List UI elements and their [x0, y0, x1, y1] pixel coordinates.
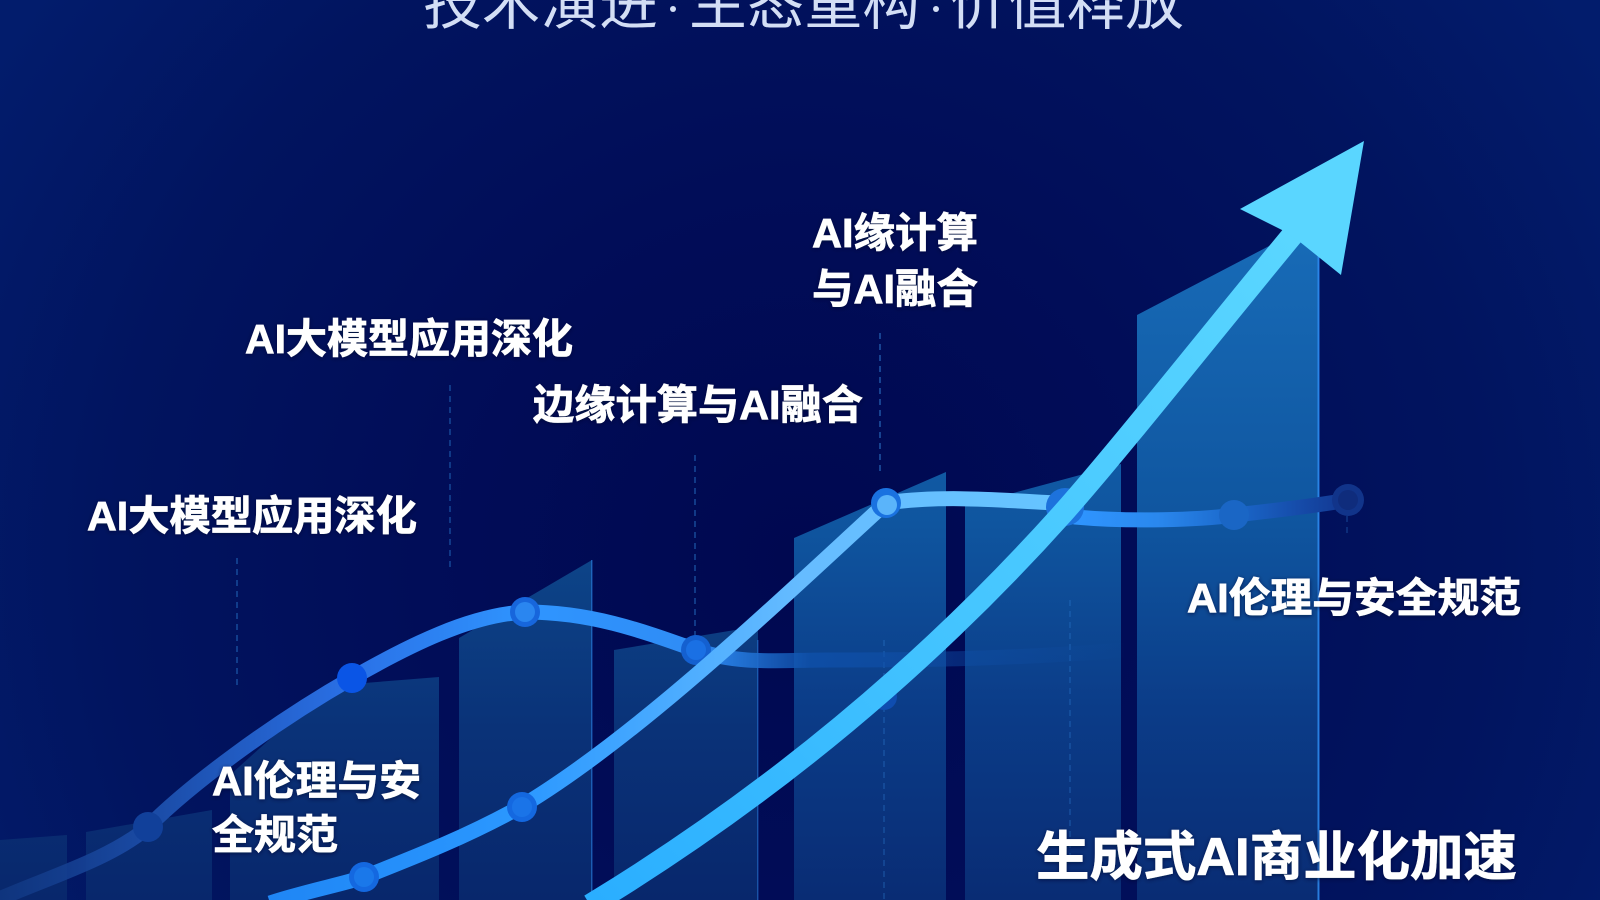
bar 7 — [965, 464, 1121, 900]
label: edge computing and AI: 边缘计算与AI融合 — [533, 382, 863, 428]
label: AI ethics and safety, left line 1: AI伦理与安 — [212, 758, 421, 804]
node — [1046, 488, 1084, 526]
label: AI ethics and safety, right: AI伦理与安全规范 — [1187, 575, 1521, 621]
node — [133, 812, 163, 842]
node — [1332, 484, 1364, 516]
bar 1 — [0, 835, 67, 900]
node — [507, 792, 537, 822]
bar 3 — [230, 677, 439, 900]
arrowhead — [1240, 141, 1364, 275]
node — [1219, 500, 1249, 530]
bar 8 — [1137, 220, 1319, 900]
curve: lower blue trend line — [0, 597, 1125, 900]
node — [349, 862, 379, 892]
label: AI edge computing, line 2: 与AI融合 — [812, 266, 978, 312]
arrow: main growth line — [590, 141, 1364, 900]
label: AI edge computing, line 1: AI缘计算 — [812, 210, 978, 256]
node — [337, 663, 367, 693]
bar 6 — [794, 472, 946, 900]
bar 2 — [86, 810, 212, 900]
node — [510, 597, 540, 627]
node behind arrow — [871, 684, 897, 710]
curve: light blue trend line — [270, 484, 1364, 900]
bar chart — [0, 220, 1320, 900]
node — [871, 488, 901, 518]
node — [681, 635, 711, 665]
dashed guide lines — [237, 333, 1347, 900]
label: large model applications, upper: AI大模型应用深化 — [245, 316, 573, 362]
bar 4 — [459, 560, 592, 900]
labels — [87, 210, 1521, 887]
title — [423, 0, 1184, 37]
label: AI ethics and safety, left line 2: 全规范 — [212, 812, 338, 858]
bar 5 — [614, 628, 758, 900]
label: large model applications, lower: AI大模型应用深化 — [87, 493, 417, 539]
label: generative AI commercialization: 生成式AI商业化加速 — [1036, 828, 1517, 887]
